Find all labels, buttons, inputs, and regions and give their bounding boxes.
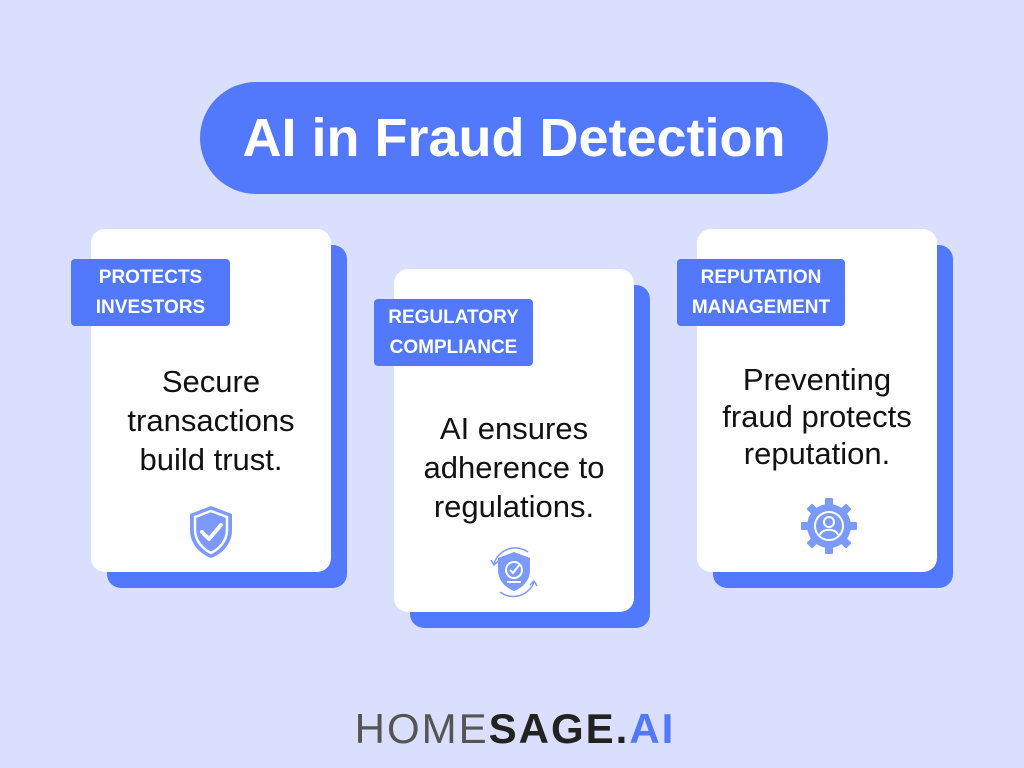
title xyxy=(200,82,828,194)
text: secure transactions: Secure transactions build trust. xyxy=(127,364,295,477)
tag: reputation management: REPUTATION xyxy=(701,266,821,288)
icon: gear with person xyxy=(801,498,857,554)
logo: HOMESAGE.AI xyxy=(355,705,675,752)
tag: regulatory compliance: COMPLIANCE xyxy=(390,336,517,358)
tag: protects investors xyxy=(71,259,230,326)
panel: regulatory compliance xyxy=(374,269,650,628)
tag: reputation management xyxy=(677,259,845,326)
title: AI in Fraud Detection xyxy=(242,108,786,168)
tag: reputation management: MANAGEMENT xyxy=(692,296,830,318)
text: preventing fraud: Preventing fraud protects reputation. xyxy=(722,362,912,471)
panel: protects investors xyxy=(71,229,347,588)
tag: protects investors: PROTECTS xyxy=(99,266,202,288)
icon: shield with cycle arrows xyxy=(490,547,538,598)
tag: regulatory compliance xyxy=(374,299,533,366)
tag: regulatory compliance: REGULATORY xyxy=(388,306,519,328)
tag: protects investors: INVESTORS xyxy=(96,296,205,318)
text: ai ensures adherence: AI ensures adherence to regulations. xyxy=(424,411,604,524)
icon: shield check xyxy=(190,506,232,558)
panel: reputation management xyxy=(677,229,953,588)
